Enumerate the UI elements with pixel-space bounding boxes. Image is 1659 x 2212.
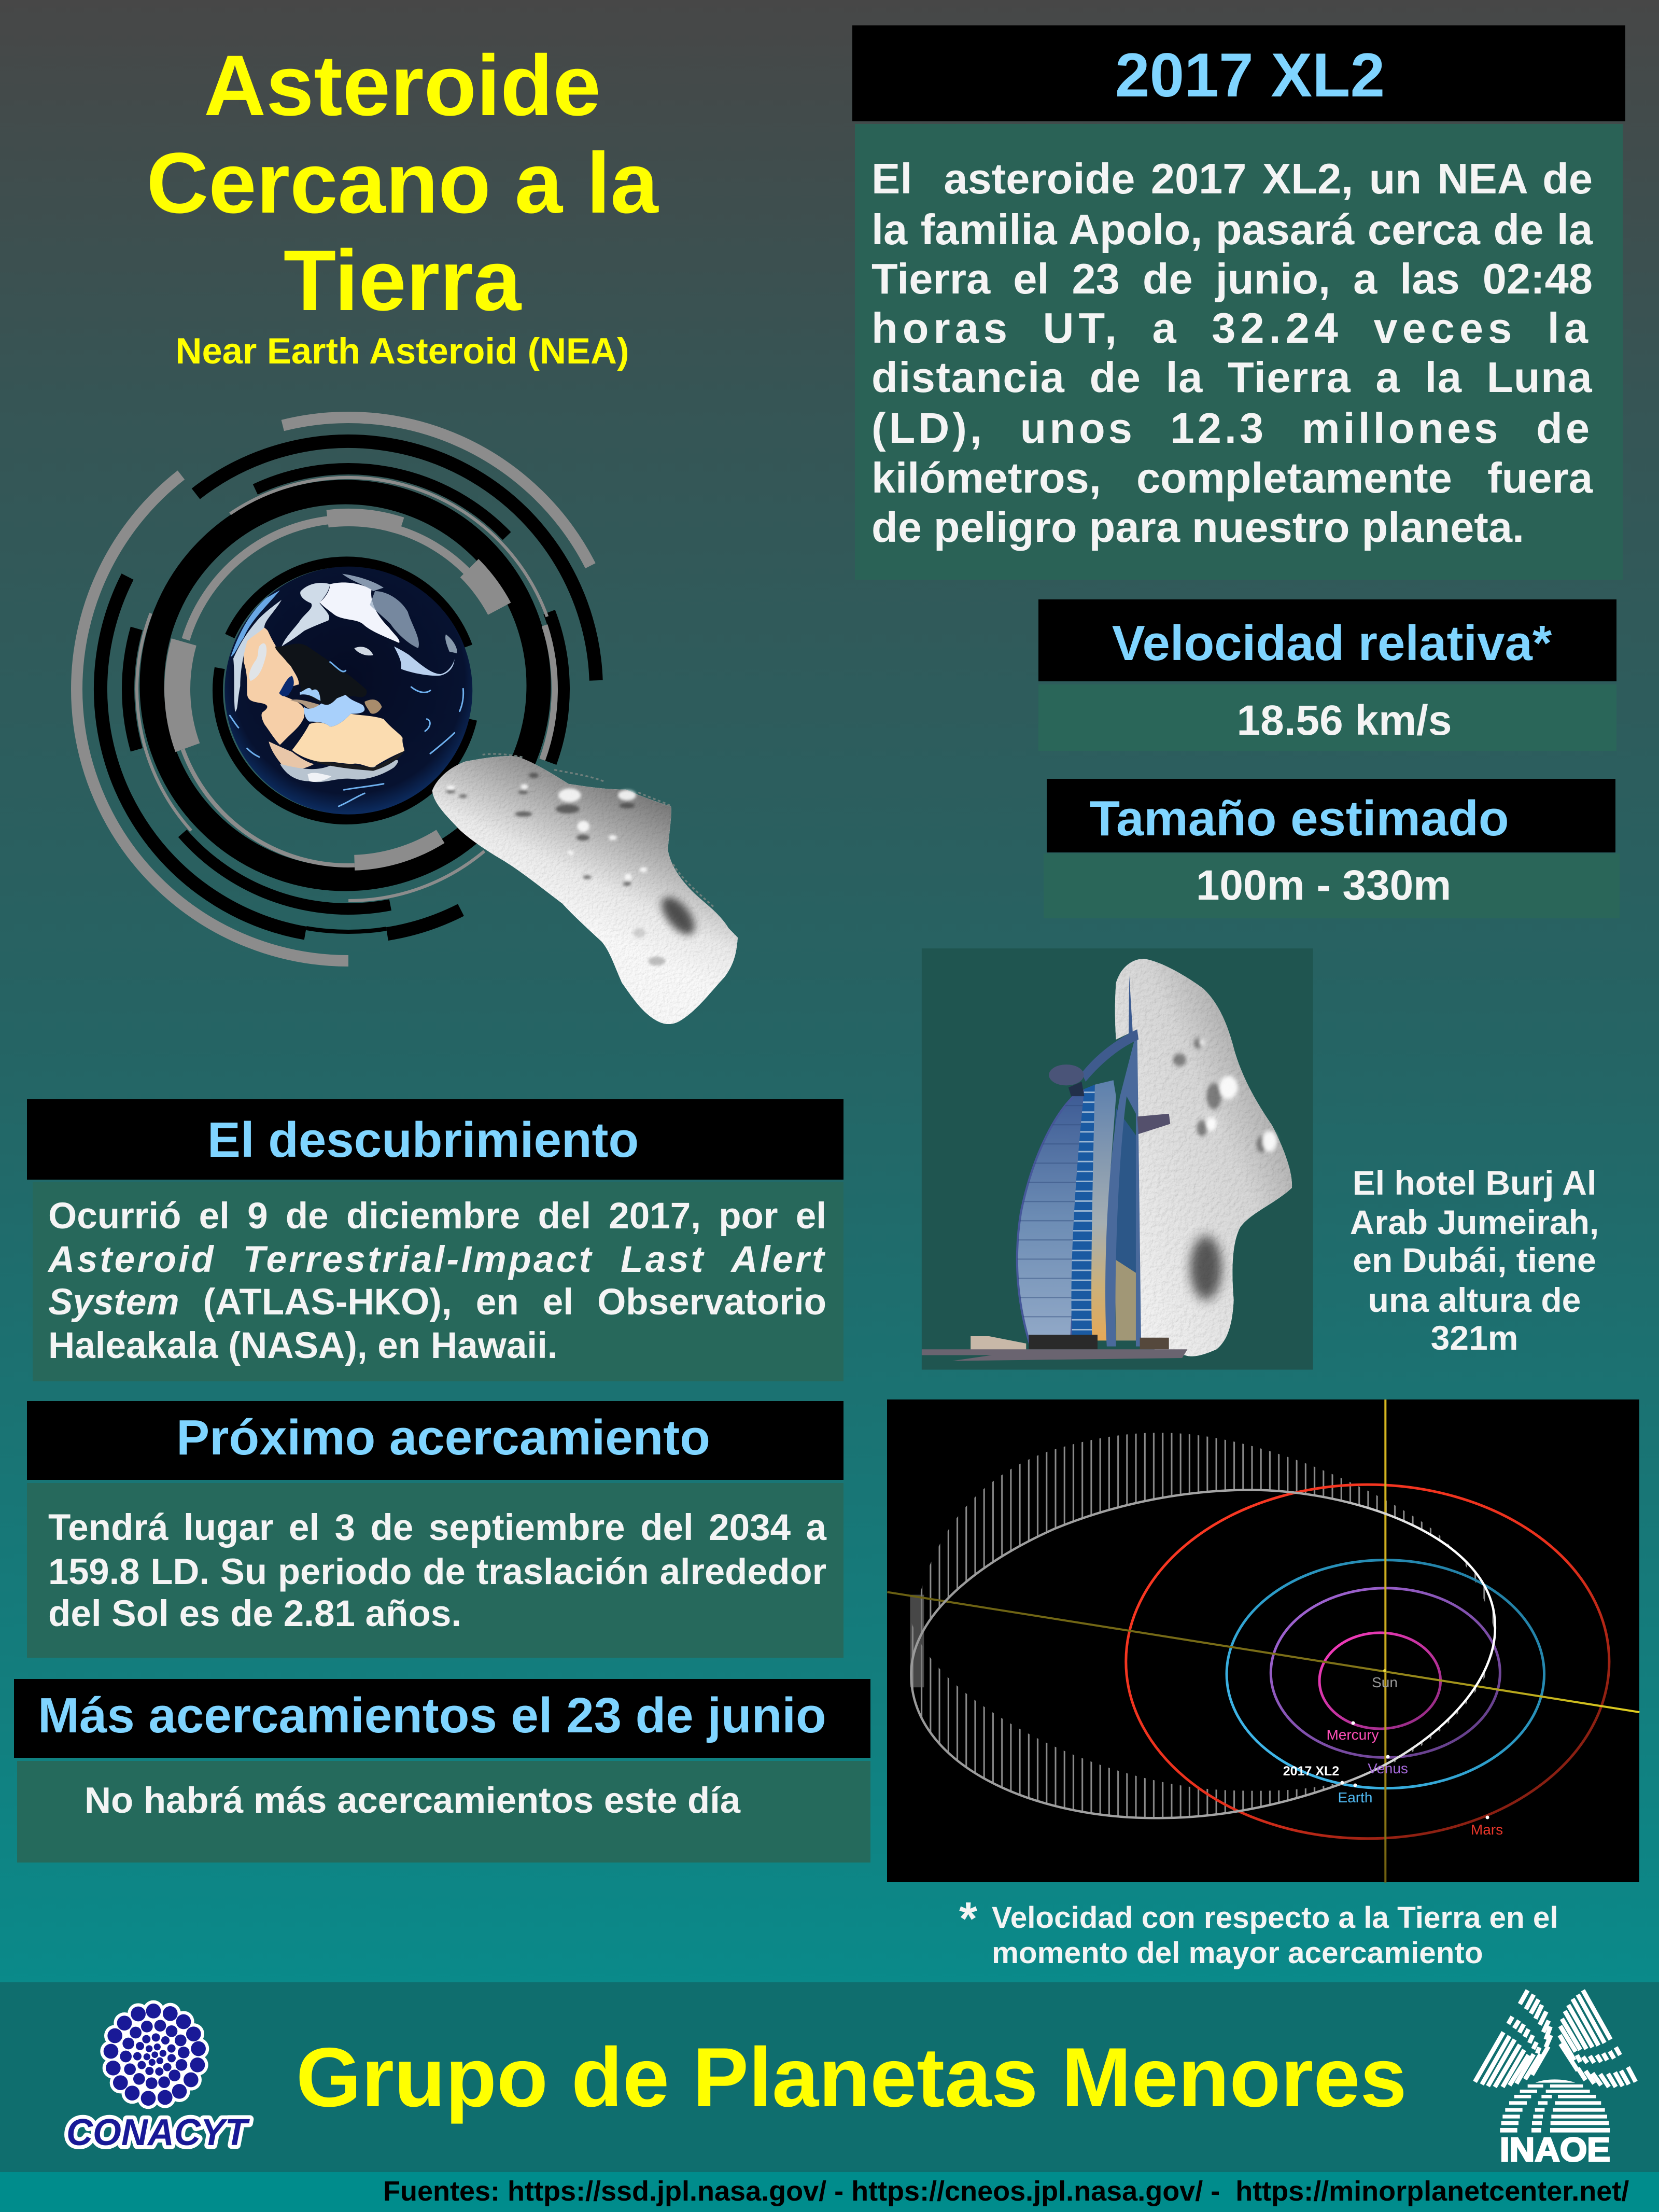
chart: orbit diagram of 2017 XL2: Venus: [1368, 1760, 1408, 1776]
text block: next approach: 159.8 LD. Su periodo de traslación alrededor: [48, 1551, 826, 1592]
text block: description: (LD), unos 12.3 millones de: [871, 404, 1593, 452]
text block: discovery: Haleakala (NASA), en Hawaii.: [48, 1325, 558, 1366]
chart: orbit diagram of 2017 XL2: [887, 1399, 1639, 1883]
panel: el descubrimiento: [27, 1099, 843, 1381]
caption: hotel comparison: Arab Jumeirah,: [1350, 1203, 1599, 1241]
caption: hotel comparison: en Dubái, tiene: [1353, 1241, 1596, 1279]
caption: hotel comparison: 321m: [1431, 1319, 1518, 1357]
text block: description: [855, 124, 1623, 580]
chart: orbit diagram of 2017 XL2: Mercury: [1326, 1727, 1379, 1743]
panel: tamaño estimado: [1044, 779, 1620, 918]
text block: discovery: Asteroid Terrestrial-Impact Last Alert: [48, 1239, 826, 1280]
text block: discovery: [33, 1182, 843, 1381]
value: velocity: [1038, 684, 1616, 751]
heading: próximo acercamiento: Próximo acercamiento: [176, 1410, 710, 1465]
sources: Fuentes: https://ssd.jpl.nasa.gov/ - https://cneos.jpl.nasa.gov/ - https://minorplanetcenter.net/: [383, 2176, 1629, 2207]
logo: INAOE: INAOE: [1500, 2131, 1610, 2168]
title: Cercano a la: [146, 135, 658, 231]
chart: orbit diagram of 2017 XL2: Earth: [1338, 1789, 1372, 1805]
logo: INAOE: [1475, 1990, 1636, 2168]
footnote: velocity: *: [959, 1893, 977, 1945]
heading: velocidad relativa: Velocidad relativa*: [1112, 615, 1552, 671]
footnote: velocity: Velocidad con respecto a la Tierra en el: [992, 1901, 1558, 1935]
text block: description: Tierra el 23 de junio, a las 02:48: [871, 255, 1593, 303]
value: velocity: 18.56 km/s: [1237, 697, 1452, 744]
chart: orbit diagram of 2017 XL2: Sun: [1372, 1674, 1398, 1690]
text block: next approach: Tendrá lugar el 3 de septiembre del 2034 a: [48, 1507, 826, 1548]
chart: orbit diagram of 2017 XL2: 2017 XL2: [1283, 1764, 1339, 1779]
text block: next approach: del Sol es de 2.81 años.: [48, 1593, 461, 1634]
icon: asteroid 2017 XL2: [432, 754, 738, 1024]
text block: next approach: [27, 1483, 843, 1658]
heading: más acercamientos: Más acercamientos el 23 de junio: [38, 1688, 826, 1743]
value: size: 100m - 330m: [1196, 862, 1451, 909]
heading: el descubrimiento: El descubrimiento: [207, 1112, 639, 1168]
title: Near Earth Asteroid (NEA): [176, 330, 629, 371]
title: [146, 38, 659, 371]
value: size: [1044, 853, 1620, 918]
heading: más acercamientos: [14, 1679, 870, 1758]
panel: 2017 XL2: [852, 25, 1625, 580]
text block: no more approaches: No habrá más acercamientos este día: [85, 1780, 740, 1821]
logo: CONACYT: CONACYT: [66, 2112, 250, 2153]
text block: description: El asteroide 2017 XL2, un NEA de: [871, 155, 1593, 203]
heading: el descubrimiento: [27, 1099, 843, 1180]
footer title: Grupo de Planetas Menores: [296, 2031, 1407, 2124]
title: Asteroide: [204, 38, 601, 134]
title: Tierra: [284, 233, 521, 329]
footnote: velocity: [959, 1893, 1558, 1970]
heading: 2017 XL2: 2017 XL2: [1115, 40, 1385, 110]
text block: discovery: Ocurrió el 9 de diciembre del 2017, por el: [48, 1196, 826, 1237]
logo: CONACYT: [66, 2000, 250, 2153]
chart: orbit diagram of 2017 XL2: Mars: [1471, 1822, 1503, 1838]
panel: próximo acercamiento: [27, 1401, 843, 1658]
panel: velocidad relativa: [1038, 599, 1616, 751]
caption: hotel comparison: una altura de: [1368, 1281, 1581, 1319]
caption: hotel comparison: El hotel Burj Al: [1353, 1164, 1596, 1202]
text block: description: de peligro para nuestro planeta.: [871, 503, 1524, 551]
photo comparison: Burj Al Arab hotel and asteroid: [922, 948, 1313, 1370]
footnote: velocity: momento del mayor acercamiento: [992, 1936, 1483, 1970]
orbital rings around Earth: [1, 341, 696, 1037]
text block: description: horas UT, a 32.24 veces la: [871, 304, 1593, 352]
text block: discovery: System (ATLAS-HKO), en el Observatorio: [48, 1282, 826, 1323]
text block: description: la familia Apolo, pasará cerca de la: [871, 205, 1593, 254]
icon: Earth globe: [213, 556, 477, 824]
heading: tamaño estimado: [1047, 779, 1615, 852]
panel: más acercamientos: [14, 1679, 870, 1863]
heading: velocidad relativa: [1038, 599, 1616, 681]
heading: 2017 XL2: [852, 25, 1625, 121]
text block: description: distancia de la Tierra a la Luna: [871, 353, 1593, 401]
heading: próximo acercamiento: [27, 1401, 843, 1480]
heading: tamaño estimado: Tamaño estimado: [1089, 791, 1509, 846]
caption: hotel comparison: [1350, 1164, 1599, 1357]
text block: description: kilómetros, completamente fuera: [871, 454, 1593, 502]
footer band: [0, 1982, 1659, 2212]
text block: no more approaches: [17, 1761, 870, 1863]
